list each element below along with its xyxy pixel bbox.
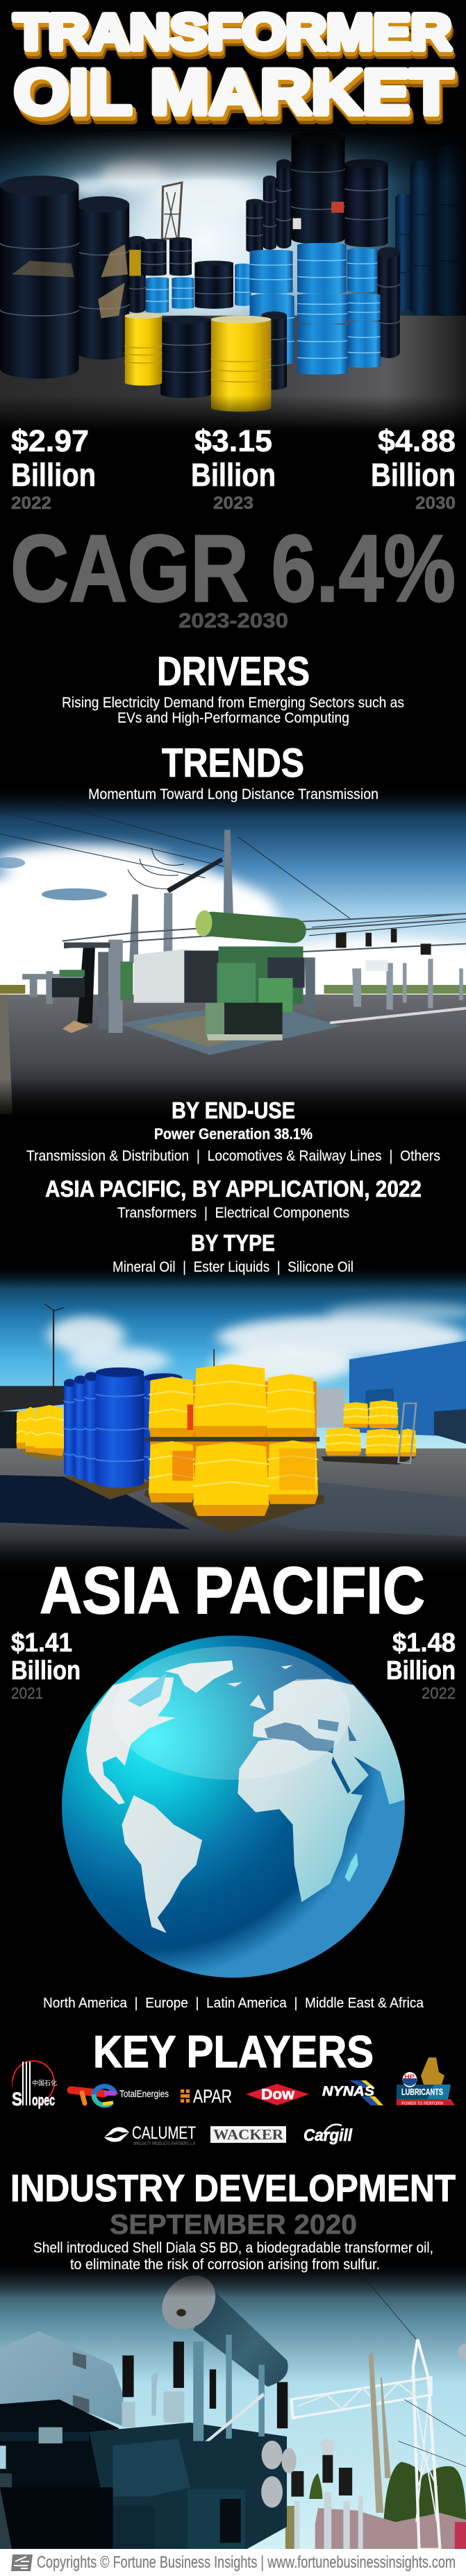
logo: APAR	[181, 2086, 232, 2107]
heading: by end-use: BY END-USE	[172, 1097, 295, 1123]
regional stat 2021: $1.41	[11, 1628, 72, 1658]
end-use segments: Transmission & Distribution | Locomotives & Railway Lines | Others	[26, 1148, 440, 1164]
logo: HP Lubricants: HP	[404, 2073, 415, 2080]
regional stat 2022: $1.48	[392, 1628, 456, 1658]
drivers text: EVs and High-Performance Computing	[117, 710, 349, 726]
logo: Calumet: CALUMET	[132, 2123, 196, 2143]
development text: Shell introduced Shell Diala S5 BD, a biodegradable transformer oil,	[33, 2240, 433, 2256]
title line 1: TRANSFORMER	[14, 5, 451, 60]
stat 2022: 2022	[11, 494, 51, 513]
logo: HP Lubricants: POWER TO PERFORM	[401, 2102, 443, 2106]
stat 2030: Billion	[371, 457, 456, 493]
stat 2022: Billion	[11, 457, 96, 493]
application segments: Transformers | Electrical Components	[117, 1205, 349, 1221]
other regions: North America | Europe | Latin America | Middle East & Africa	[43, 1996, 424, 2011]
heading: trends: TRENDS	[162, 741, 304, 786]
development text	[33, 2240, 433, 2273]
title line 2: OIL MARKET	[17, 60, 454, 131]
stat 2023: 2023	[213, 494, 253, 513]
logo: Nynas	[322, 2080, 383, 2105]
title line 2: OIL MARKET	[18, 64, 456, 135]
trends text: Momentum Toward Long Distance Transmission	[88, 786, 378, 802]
regional stat 2021: 2021	[11, 1684, 43, 1702]
logo: Calumet	[104, 2123, 196, 2146]
regional stat 2022	[386, 1628, 456, 1702]
logo: Sinopec: 中国石化	[32, 2079, 57, 2087]
logo: Sinopec: opec	[32, 2091, 55, 2109]
drivers text	[62, 695, 404, 726]
CAGR period: 2023-2030	[178, 609, 288, 632]
stat 2022: $2.97	[11, 424, 89, 458]
leading segment: Power Generation 38.1%	[154, 1125, 313, 1143]
logo: HP Lubricants	[397, 2057, 455, 2106]
photo: electrical substation	[0, 790, 466, 1120]
logo: APAR: APAR	[193, 2086, 232, 2107]
highlight	[113, 1647, 350, 1780]
footer	[0, 2549, 466, 2576]
land masses	[86, 1660, 407, 1933]
development date: SEPTEMBER 2020	[110, 2209, 357, 2240]
photo: oil barrels yard	[0, 129, 466, 431]
regional stat 2021	[11, 1628, 81, 1702]
logo: Sinopec	[12, 2061, 57, 2110]
stat 2023: Billion	[191, 457, 276, 493]
logo: Dow	[246, 2084, 309, 2105]
title line 1: TRANSFORMER	[17, 11, 453, 67]
logo: Nynas: NYNAS	[322, 2085, 374, 2099]
heading: key players: KEY PLAYERS	[93, 2026, 374, 2077]
heading: asia pacific: ASIA PACIFIC	[40, 1554, 425, 1628]
heading: drivers: DRIVERS	[157, 649, 310, 694]
globe	[62, 1635, 407, 1978]
title	[14, 5, 456, 135]
heading: application: ASIA PACIFIC, BY APPLICATION, 2022	[45, 1176, 422, 1202]
photo: transformer station	[0, 2265, 466, 2549]
title line 2: OIL MARKET	[14, 57, 453, 128]
stat 2023	[191, 424, 276, 513]
logo: TotalEnergies	[71, 2086, 169, 2105]
icon: Fortune Business Insights logo	[11, 2554, 33, 2571]
regional stat 2021: Billion	[11, 1656, 81, 1685]
logo: Cargill: Cargill	[303, 2126, 353, 2145]
title line 1: TRANSFORMER	[15, 8, 451, 64]
logo: Dow: Dow	[261, 2087, 295, 2103]
logo: Sinopec: S	[12, 2089, 22, 2110]
regional stat 2022: 2022	[422, 1684, 456, 1702]
stat 2030: $4.88	[378, 424, 456, 458]
drivers text: Rising Electricity Demand from Emerging Sectors such as	[62, 695, 404, 711]
stat 2030	[371, 424, 456, 513]
regional stat 2022: Billion	[386, 1656, 456, 1685]
logo: Wacker: WACKER	[213, 2126, 284, 2143]
photo: drums and yellow containers	[0, 1268, 466, 1571]
logo: TotalEnergies: TotalEnergies	[119, 2088, 169, 2099]
by type segments: Mineral Oil | Ester Liquids | Silicone Oil	[113, 1259, 353, 1275]
development text: to eliminate the risk of corrosion arising from sulfur.	[70, 2257, 380, 2273]
logo: Calumet: SPECIALTY PRODUCTS PARTNERS, L.P.	[133, 2142, 196, 2146]
seas	[265, 1719, 357, 1752]
heading: by type: BY TYPE	[191, 1230, 275, 1256]
logo: HP Lubricants: LUBRICANTS	[401, 2087, 443, 2097]
stat 2030: 2030	[415, 494, 456, 513]
stat 2023: $3.15	[194, 424, 272, 458]
stat 2022	[11, 424, 96, 513]
